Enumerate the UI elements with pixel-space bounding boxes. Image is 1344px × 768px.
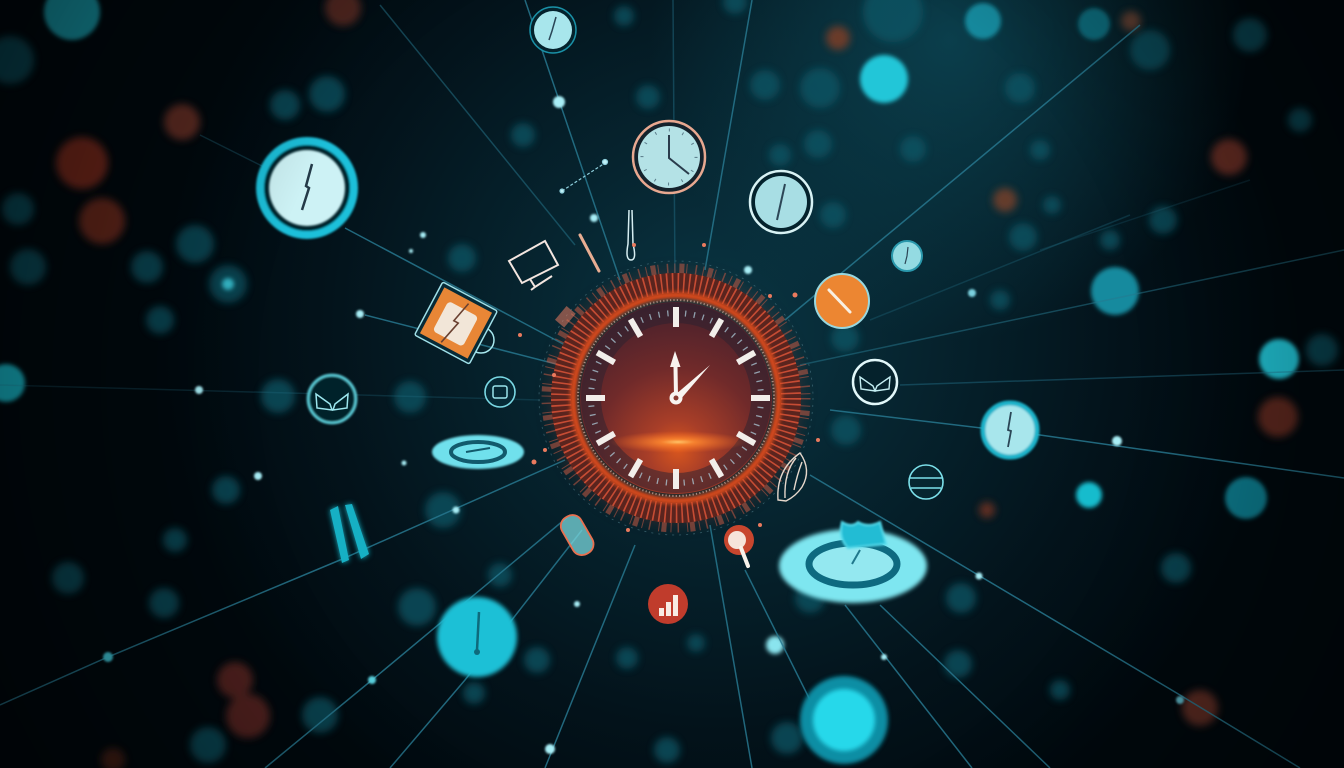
small node dots [103,96,1184,754]
central clock [539,261,813,535]
icon: bottom bright ring disc [800,676,888,764]
icon: brush pair [330,504,369,563]
clock: small right [892,241,922,271]
icon: spoon [580,235,599,271]
icon: red bar chart badge [648,584,688,624]
icon: loop pin [627,210,635,260]
icon: top node link [560,160,608,193]
horizon flare [610,431,746,453]
icon: orange tablet [415,282,497,364]
outer circuit band [539,261,813,535]
icon: capsule [557,511,597,559]
icon: feather [778,453,807,501]
icon: large target disc [779,522,927,603]
hour markers [586,307,770,489]
icon: glowing cyan disc [437,597,517,677]
icon: wide ring left [308,375,356,423]
red sparks [518,243,820,532]
clock: large left [260,141,354,235]
icon: right ring [853,360,897,404]
icon: monitor outline [509,241,558,290]
clock: salmon ring [633,121,705,193]
clock hands [670,351,710,404]
clock: far right [983,403,1037,457]
dial face [580,302,772,494]
icon: orange dial [815,274,869,328]
ring glow [566,288,786,508]
clock: white ring [750,171,812,233]
clock: top [530,7,576,53]
icon: elliptical target left [432,435,524,469]
icon: round stripe badge [909,465,943,499]
icon: small badge left [485,377,515,407]
icon: red lollipop [724,525,754,566]
